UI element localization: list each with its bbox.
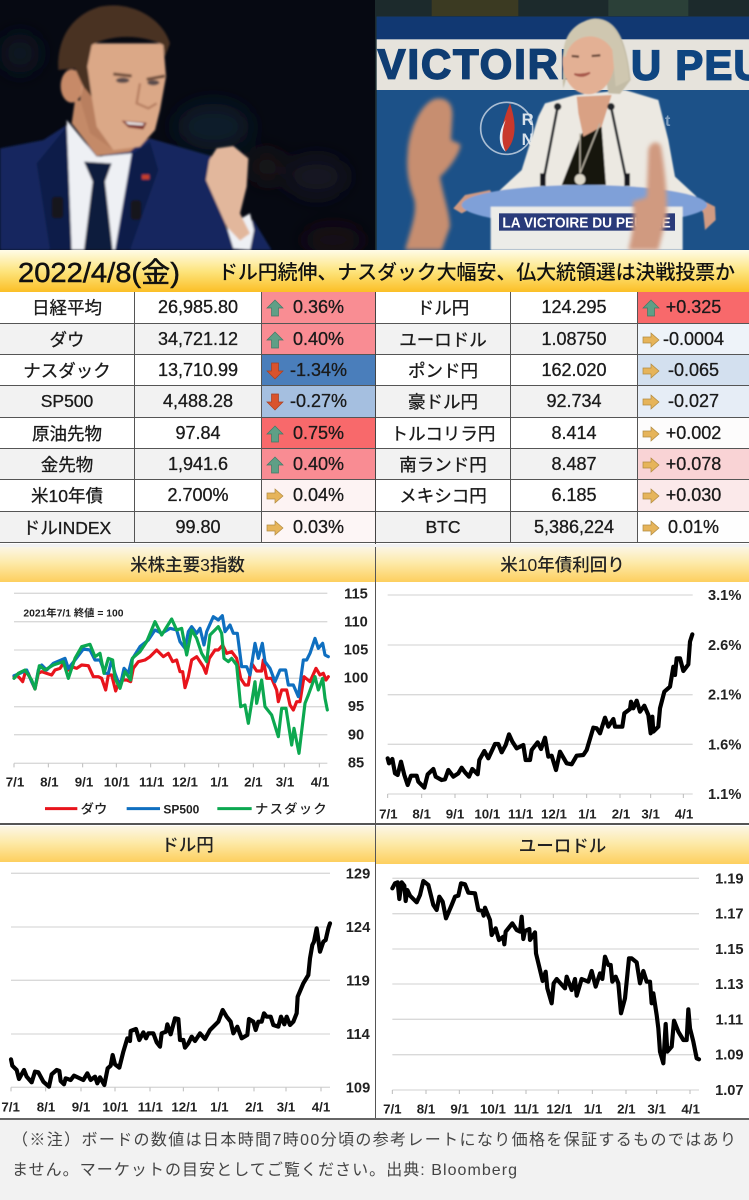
row: ドル円 [376,292,749,324]
legend: SP500 [163,802,200,816]
x axis labels: 4/1 [311,775,330,790]
row: 日経平均: 日経平均 [32,298,102,318]
heading: 米10年債利回り [376,547,749,582]
y axis labels: 1.6% [708,737,741,753]
x axis labels: 3/1 [277,1100,296,1115]
y axis labels: 90 [348,727,364,743]
row: 金先物 [0,449,375,480]
y axis labels: 1.1% [708,787,741,803]
row: ポンド円 [376,355,749,386]
chart: USD/JPY [1,866,371,1115]
heading: 米10年債利回り: 米10年債利回り [500,555,625,575]
row: ポンド円: 162.020 [541,360,607,380]
row: トルコリラ円: トルコリラ円 [391,424,495,444]
line: ナスダック [14,619,327,753]
y axis labels: 119 [346,973,370,989]
row: BTC: 5,386,224 [534,516,614,536]
table: currency indicators [375,292,749,544]
y axis labels: 2.1% [708,688,741,704]
date: 2022/4/8(金) [18,257,180,288]
x axis labels: 8/1 [37,1100,56,1115]
headline: ドル円続伸、ナスダック大幅安、仏大統領選は決戦投票か [218,261,735,284]
x axis labels: 7/1 [1,1100,21,1115]
row: BTC: BTC [426,516,460,536]
row: SP500: 4,488.28 [163,391,233,411]
row: メキシコ円: 6.185 [551,485,597,505]
x axis labels: 9/1 [72,1100,91,1115]
y axis labels: 1.09 [715,1048,744,1064]
y axis labels: 110 [344,614,368,630]
y axis labels: 100 [344,671,368,687]
row: 南ランド円: +0.078 [666,454,721,474]
x axis labels [6,775,330,790]
x axis labels: 9/1 [446,806,465,821]
photo: Le Pen at podium: t [665,113,671,130]
row: ドル円: +0.325 [666,297,721,317]
row: ドル円: ドル円 [417,298,469,318]
row: SP500 [0,386,375,418]
photo: Macron speaking [0,0,375,250]
row: ポンド円: ポンド円 [408,360,478,380]
x axis labels: 2/1 [617,1102,636,1117]
heading: ユーロドル: ユーロドル [519,836,606,856]
photo: Le Pen at podium: N [522,130,534,149]
x axis labels: 7/1 [379,806,398,821]
row: 豪ドル円 [376,386,749,418]
row: 南ランド円 [376,449,749,480]
x axis labels: 10/1 [474,806,501,821]
x axis labels: 12/1 [171,1100,198,1115]
photo: Le Pen at podium [375,0,749,250]
x axis labels: 2/1 [244,775,263,790]
row: 金先物: 金先物 [41,454,93,474]
photo: Le Pen at podium: R [522,110,534,129]
row: ユーロドル: 1.08750 [541,328,607,348]
row: ダウ: 34,721.12 [158,328,238,348]
row: 豪ドル円: 92.734 [546,391,602,411]
x axis labels: 11/1 [139,775,165,790]
y axis labels: 1.19 [715,871,744,887]
photo: Le Pen at podium: LA VICTOIRE DU PEUPLE [502,215,671,231]
heading: ユーロドル [376,826,749,864]
x axis labels [383,1102,701,1117]
chart note: 2021年7/1 終値 = 100 [23,606,124,619]
row: トルコリラ円: 8.414 [551,422,597,442]
x axis labels: 4/1 [681,1102,701,1117]
chart: US 10-year yield [379,588,741,821]
row: 豪ドル円: 豪ドル円 [408,392,478,412]
x axis labels: 12/1 [172,775,199,790]
y axis labels: 114 [346,1027,371,1043]
row: SP500: SP500 [41,391,93,411]
row: ドルINDEX [0,512,375,543]
row: 原油先物 [0,418,375,449]
x axis labels: 11/1 [514,1102,540,1117]
x axis labels: 10/1 [102,1100,129,1115]
x axis labels: 3/1 [641,806,661,821]
row: ドルINDEX: 99.80 [175,516,221,536]
row: ドル円: 124.295 [541,297,607,317]
row: ドルINDEX: 0.03% [293,516,344,536]
x axis labels: 10/1 [480,1102,507,1117]
x axis labels: 3/1 [276,775,295,790]
row: ポンド円: -0.065 [668,360,719,380]
row: 南ランド円: 南ランド円 [399,454,487,474]
row: 南ランド円: 8.487 [551,454,597,474]
row: メキシコ円: メキシコ円 [399,486,487,506]
x axis labels: 4/1 [312,1100,331,1115]
heading: ドル円: ドル円 [161,834,214,854]
y axis labels: 115 [344,586,368,602]
line: SP500 [14,616,328,697]
heading: 米株主要3指数 [0,547,375,582]
y axis labels: 109 [346,1080,370,1096]
y axis labels: 1.15 [715,942,744,958]
y axis labels: 85 [348,756,364,772]
y axis labels [708,588,741,803]
row: 金先物: 1,941.6 [168,454,228,474]
x axis labels: 1/1 [210,775,229,790]
row: 日経平均: 26,985.80 [158,297,238,317]
row: ナスダック: -1.34% [290,360,347,380]
x axis labels: 9/1 [75,775,94,790]
row: ユーロドル: -0.0004 [663,328,724,348]
y axis labels: 1.17 [715,907,744,923]
row: ダウ [0,324,375,355]
line: USD/JPY [11,923,330,1087]
row: 原油先物: 原油先物 [32,424,102,444]
y axis labels: 105 [344,643,368,659]
row: トルコリラ円: +0.002 [666,422,721,442]
footnote [0,1118,749,1200]
row: ユーロドル: ユーロドル [399,330,487,350]
row: ナスダック: ナスダック [23,360,111,380]
x axis labels: 8/1 [417,1102,436,1117]
legend [45,800,327,816]
row: ダウ: ダウ [50,330,84,350]
footnote: ません。マーケットの目安としてご覧ください。出典: Bloomberg [12,1161,517,1179]
row: 米10年債: 2.700% [167,485,229,505]
row: 米10年債: 米10年債 [31,486,103,506]
x axis labels: 3/1 [647,1102,667,1117]
row: 米10年債 [0,480,375,512]
y axis labels: 1.07 [715,1083,744,1099]
y axis labels: 124 [346,920,371,936]
x axis labels: 7/1 [6,775,25,790]
row: ナスダック [0,355,375,386]
x axis labels: 9/1 [450,1102,470,1117]
x axis labels: 10/1 [104,775,130,790]
y axis labels: 2.6% [708,638,741,654]
y axis labels [715,871,744,1099]
row: ユーロドル [376,324,749,355]
row: 金先物: 0.40% [293,454,344,474]
row: 原油先物: 0.75% [293,422,344,442]
x axis labels: 1/1 [584,1102,603,1117]
x axis labels [1,1100,331,1115]
x axis labels: 2/1 [612,806,631,821]
line: yield [388,634,692,788]
x axis labels: 8/1 [412,806,432,821]
footnote: （※注）ボードの数値は日本時間7時00分頃の参考レートになり価格を保証するものではあり [12,1131,736,1149]
row: ドルINDEX: ドルINDEX [23,518,111,538]
x axis labels: 2/1 [245,1100,264,1115]
row: メキシコ円 [376,480,749,512]
row: トルコリラ円 [376,418,749,449]
x axis labels: 12/1 [546,1102,573,1117]
header banner [0,250,749,292]
x axis labels: 11/1 [138,1100,164,1115]
row: 原油先物: 97.84 [175,422,221,442]
x axis labels: 12/1 [541,806,568,821]
table: stock and commodity indicators [0,292,375,543]
y axis labels [346,866,371,1096]
row: 日経平均: 0.36% [293,297,344,317]
row: SP500: -0.27% [290,391,347,411]
heading: 米株主要3指数: 米株主要3指数 [130,555,245,575]
x axis labels: 4/1 [675,806,694,821]
row: BTC [376,512,749,543]
y axis labels: 129 [346,866,370,882]
line: ダウ [14,645,328,710]
x axis labels [379,806,694,821]
heading: ドル円 [0,826,375,862]
row: ダウ: 0.40% [293,328,344,348]
row: 豪ドル円: -0.027 [668,391,719,411]
row: BTC: 0.01% [668,516,719,536]
chart: EUR/USD [383,871,744,1117]
row: メキシコ円: +0.030 [666,485,721,505]
line: EUR/USD [392,881,699,1063]
row: ナスダック: 13,710.99 [158,360,238,380]
x axis labels: 11/1 [508,806,534,821]
y axis labels: 1.13 [715,977,744,993]
x axis labels: 1/1 [578,806,597,821]
photo: Le Pen at podium: VICTOIRE [378,40,590,87]
legend: ダウ [81,800,107,816]
chart: US stock indices [6,586,368,816]
y axis labels: 1.11 [715,1012,743,1028]
row: 日経平均 [0,292,375,324]
legend: ナスダック [255,800,327,816]
x axis labels: 8/1 [40,775,59,790]
y axis labels: 95 [348,699,364,715]
y axis labels [344,586,368,772]
x axis labels: 1/1 [210,1100,229,1115]
row: 米10年債: 0.04% [293,485,344,505]
x axis labels: 7/1 [383,1102,402,1117]
y axis labels: 3.1% [708,588,741,604]
